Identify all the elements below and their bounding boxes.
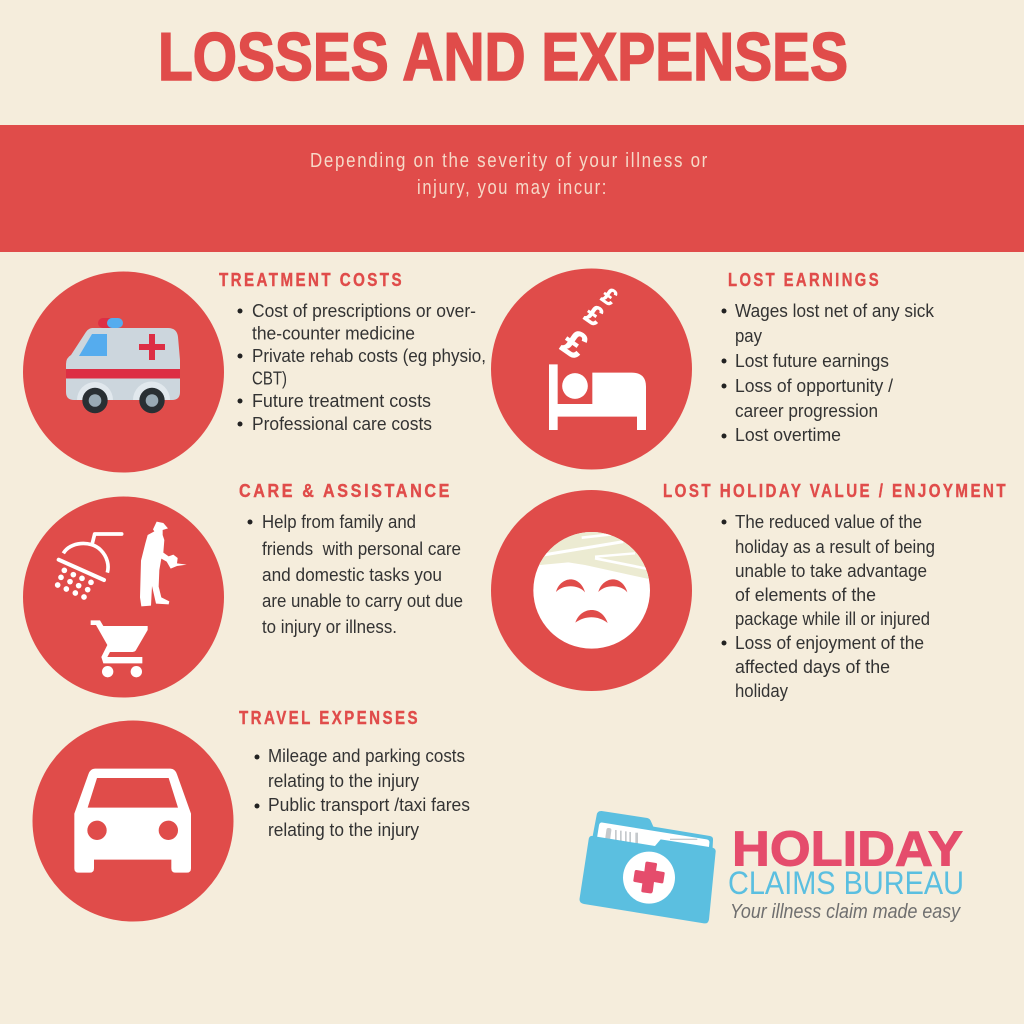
list: treatment costs: the-counter medicine — [252, 324, 415, 344]
list: treatment costs: Professional care costs — [252, 414, 432, 434]
list: lost holiday value: holiday as a result of being — [735, 537, 935, 557]
list: care and assistance: and domestic tasks you — [262, 565, 442, 585]
banner text: Depending on the severity of your illness or — [310, 150, 709, 172]
panel: care and assistance — [23, 480, 463, 698]
icon: bed with pound signs: £ — [597, 282, 622, 311]
banner — [0, 125, 1024, 252]
list: lost holiday value: of elements of the — [735, 585, 876, 605]
icon: bandaged face — [491, 490, 692, 691]
title: LOSSES AND EXPENSES — [158, 19, 848, 95]
list: lost earnings — [722, 301, 935, 445]
list: care and assistance — [248, 512, 463, 637]
list: travel expenses: Public transport /taxi fares — [268, 795, 470, 815]
icon: shower, gardener and cart — [23, 496, 224, 698]
list: lost holiday value: affected days of the — [735, 657, 890, 677]
icon: ambulance — [23, 272, 224, 472]
panel: lost holiday value — [491, 480, 1008, 701]
list: treatment costs — [238, 301, 486, 434]
list: care and assistance: are unable to carry out due — [262, 591, 463, 611]
list: lost holiday value: holiday — [735, 681, 788, 701]
heading: travel expenses: TRAVEL EXPENSES — [239, 707, 420, 728]
logo tagline: Your illness claim made easy — [730, 901, 961, 923]
panel: treatment costs — [23, 269, 486, 472]
heading: lost earnings: LOST EARNINGS — [728, 269, 881, 290]
banner text: injury, you may incur: — [417, 177, 608, 199]
list: treatment costs: Private rehab costs (eg physio, — [252, 346, 486, 366]
list: lost holiday value: unable to take advantage — [735, 561, 927, 581]
icon: car — [32, 720, 234, 922]
heading: care and assistance: CARE & ASSISTANCE — [239, 480, 452, 501]
list: care and assistance: Help from family and — [262, 512, 416, 532]
list: lost holiday value: package while ill or injured — [735, 609, 930, 629]
list: lost earnings: pay — [735, 326, 762, 346]
list: treatment costs: Future treatment costs — [252, 391, 431, 411]
list: lost earnings: career progression — [735, 401, 878, 421]
panel: lost earnings — [491, 268, 935, 470]
list: lost earnings: Lost future earnings — [735, 351, 889, 371]
list: care and assistance: to injury or illness. — [262, 617, 397, 637]
list: lost holiday value: The reduced value of the — [735, 512, 922, 532]
panel: travel expenses — [32, 707, 470, 922]
list: lost holiday value — [722, 512, 935, 701]
icon: bed with pound signs — [491, 268, 692, 470]
icon: medical folder — [580, 811, 716, 923]
logo sub-wordmark: CLAIMS BUREAU — [728, 865, 964, 901]
banner text — [310, 150, 709, 199]
list: treatment costs: CBT) — [252, 368, 287, 388]
list: travel expenses: relating to the injury — [268, 820, 419, 840]
list: lost holiday value: Loss of enjoyment of the — [735, 633, 924, 653]
list: travel expenses: Mileage and parking costs — [268, 746, 465, 766]
heading: treatment costs: TREATMENT COSTS — [219, 269, 404, 290]
icon: bed with pound signs: £ — [554, 320, 596, 367]
list: treatment costs: Cost of prescriptions or over- — [252, 301, 476, 321]
icon: bed with pound signs: £ — [579, 298, 609, 332]
logo wordmark: HOLIDAY — [732, 822, 963, 876]
list: care and assistance: friends with personal care — [262, 539, 461, 559]
list: travel expenses: relating to the injury — [268, 771, 419, 791]
list: lost earnings: Loss of opportunity / — [735, 376, 893, 396]
list: lost earnings: Wages lost net of any sick — [735, 301, 935, 321]
logo: holiday claims bureau — [580, 811, 964, 923]
list: lost earnings: Lost overtime — [735, 425, 841, 445]
list: travel expenses — [254, 746, 470, 840]
